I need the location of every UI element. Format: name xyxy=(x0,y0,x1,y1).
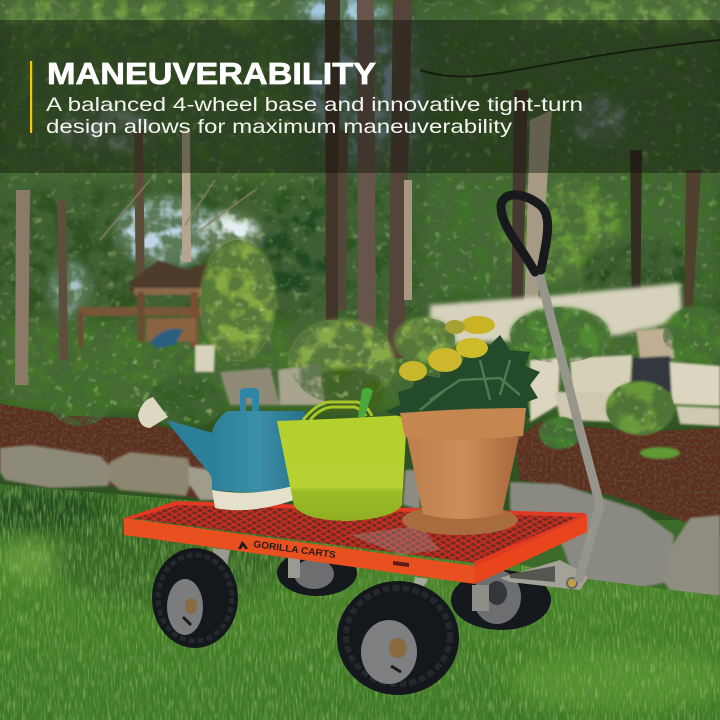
title: MANEUVERABILITY xyxy=(47,56,376,91)
rose head xyxy=(138,397,168,428)
watering can xyxy=(138,388,305,510)
right rail xyxy=(475,516,587,584)
tub body xyxy=(277,415,407,521)
front axle brackets xyxy=(212,548,428,591)
mulch beds xyxy=(0,400,720,540)
white base xyxy=(212,486,294,510)
black grip xyxy=(501,195,548,272)
saucer xyxy=(402,505,518,535)
dark header band xyxy=(0,20,720,173)
cart platform xyxy=(124,501,587,584)
pot body xyxy=(407,437,519,519)
back right wheel xyxy=(451,570,551,630)
rail slot xyxy=(393,561,409,567)
background boulders xyxy=(195,328,720,426)
tub handles xyxy=(303,402,372,420)
description text: A balanced 4-wheel base and innovative tight-turn xyxy=(46,94,583,116)
cart steering tongue bracket xyxy=(500,560,588,590)
front rail xyxy=(124,518,475,584)
yellow accent bar xyxy=(30,61,32,133)
handle xyxy=(240,388,259,420)
back rails xyxy=(124,501,587,566)
body xyxy=(212,411,305,492)
metal pole xyxy=(538,268,600,582)
marigold flowers xyxy=(399,316,495,381)
brand text: GORILLA CARTS xyxy=(253,539,336,561)
foreground shrubs on mulch xyxy=(539,381,680,459)
photo background: foliage and sky xyxy=(0,0,720,520)
logo icon xyxy=(238,541,248,549)
wooden playset xyxy=(78,260,208,349)
terracotta pot xyxy=(400,408,526,535)
front left wheel xyxy=(152,548,238,648)
green tool xyxy=(358,388,373,418)
description text: design allows for maximum maneuverability xyxy=(46,116,512,138)
stone border xyxy=(0,445,720,596)
description text xyxy=(46,94,583,138)
cart handle xyxy=(501,195,600,582)
spout xyxy=(167,420,213,478)
light retaining wall xyxy=(430,283,682,345)
shrub leaf texture xyxy=(50,240,720,448)
mesh bed xyxy=(130,502,585,563)
front right wheel xyxy=(337,581,459,695)
grass lawn xyxy=(0,480,720,720)
back left wheel xyxy=(277,550,357,596)
pot rim xyxy=(400,408,526,439)
lime green tub xyxy=(277,388,407,521)
flower foliage xyxy=(385,335,540,420)
shrubs and willow xyxy=(48,240,720,428)
tree trunks xyxy=(15,0,720,385)
